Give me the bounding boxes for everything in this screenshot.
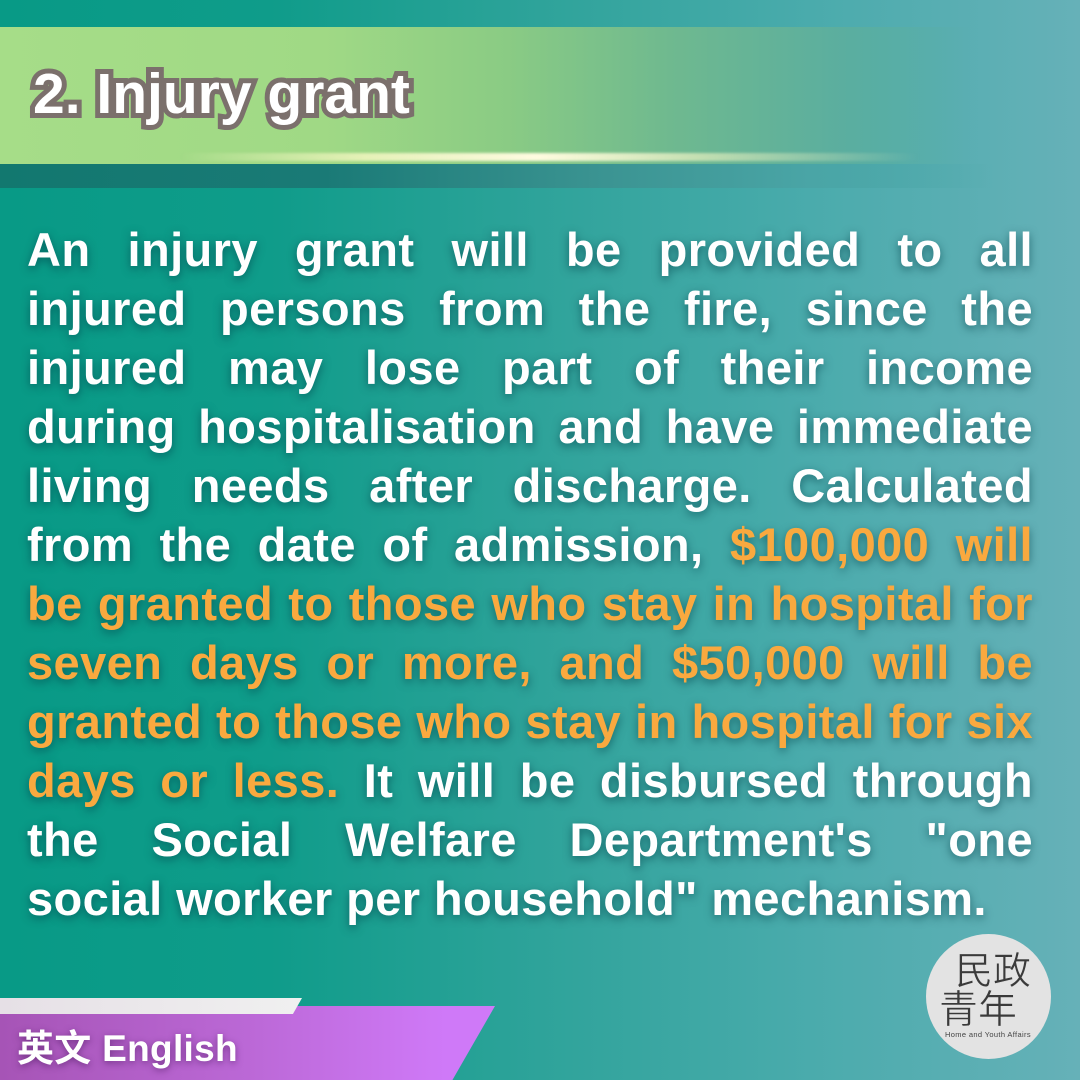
- logo characters top: 民政: [955, 940, 1031, 995]
- header banner: [0, 27, 920, 188]
- body text block: injured may lose part of their income: [27, 341, 1033, 394]
- body text block: injured persons from the fire, since the: [27, 282, 1033, 335]
- body text block: the Social Welfare Department's "one: [27, 813, 1033, 866]
- banner green band: [0, 27, 1080, 164]
- body text block: An injury grant will be provided to all: [27, 223, 1033, 276]
- logo caption: Home and Youth Affairs: [945, 1030, 1031, 1039]
- body text block: living needs after discharge. Calculated: [27, 459, 1033, 512]
- language label: 英文 English: [17, 1028, 238, 1069]
- body text block: seven days or more, and $50,000 will be: [27, 636, 1033, 689]
- body text block: be granted to those who stay in hospital for: [27, 577, 1033, 630]
- banner shadow band: [0, 164, 1080, 188]
- white strip: [0, 998, 302, 1014]
- logo badge: [926, 934, 1051, 1059]
- body text block: granted to those who stay in hospital for six: [27, 695, 1033, 748]
- body text block: [24, 223, 1035, 931]
- body text block: days or less. It will be disbursed through: [27, 754, 1033, 807]
- body text block: during hospitalisation and have immediate: [27, 400, 1033, 453]
- title: 2. Injury grant: [33, 62, 410, 126]
- footer language tab: [0, 998, 495, 1080]
- body text block: social worker per household" mechanism.: [27, 872, 987, 925]
- purple tab: [0, 1006, 495, 1080]
- logo characters bottom: 青年: [939, 979, 1017, 1035]
- banner light streak: [180, 153, 920, 161]
- body text block: from the date of admission, $100,000 will: [27, 518, 1033, 571]
